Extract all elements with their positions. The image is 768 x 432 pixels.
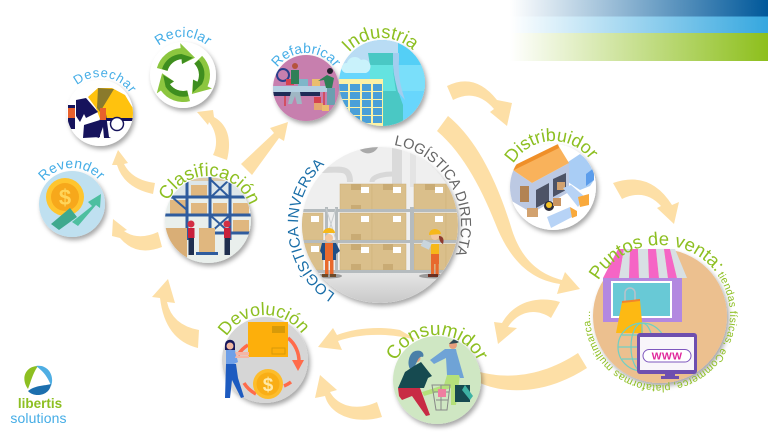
circle: industria: [339, 40, 425, 126]
circle: desechar: [67, 80, 133, 146]
arrow: clasificación to refabricar: [241, 122, 288, 175]
icon: garbage truck: [68, 88, 134, 138]
arrow: distribuidor to puntos de venta: [613, 179, 679, 224]
illustration: woman returning parcel: [225, 340, 249, 398]
icon: monitor with www: WWW: [652, 350, 682, 362]
illustration: shoppers with cart: [398, 338, 473, 416]
panel: industria: [338, 27, 430, 132]
panel: logística central: [288, 135, 472, 309]
illustration: warehouse racks: [165, 176, 252, 258]
label: devolución: Devolución: [218, 302, 308, 336]
label: refabricar: Refabricar: [271, 42, 340, 67]
header gradient banner: [510, 0, 768, 61]
icon: coin and arrow: $: [59, 185, 71, 210]
icon: monitor with www: [637, 333, 697, 379]
arrow: logística directa, industria to puntos de venta: [437, 116, 580, 294]
panel: distribuidor: [504, 128, 601, 236]
circle: puntos de venta: [593, 249, 727, 383]
arrow: devolución to clasificación: [152, 279, 199, 348]
arrow: puntos de venta to consumidor: [494, 300, 560, 344]
label: revender: Revender: [38, 160, 104, 180]
icon: dollar coin: $: [263, 375, 274, 396]
arrow: clasificación to revender: [112, 219, 162, 250]
icon: return cycle arrows: [238, 338, 299, 394]
circle: revender: [39, 171, 105, 237]
arrow: consumidor to puntos de venta band: [480, 353, 587, 390]
label: desechar: Desechar: [73, 70, 136, 92]
label: logística inversa: LOGÍSTICA INVERSA: [288, 160, 334, 302]
illustration: warehouse with trucks: [510, 144, 594, 228]
icon: recycling arrows: [149, 43, 224, 114]
label: clasificación: Clasificación: [160, 162, 258, 204]
label: canales de venta: tiendas físicas, eCommerce, plataformas multimarca...: [584, 272, 738, 392]
circle: consumidor: [393, 336, 481, 424]
icon: parcel box: [248, 322, 288, 357]
illustration: factory and building: [338, 40, 428, 130]
icon: shopping bag: [616, 288, 643, 333]
panel: puntos de venta: [584, 232, 738, 392]
label: logística directa: LOGÍSTICA DIRECTA: [395, 135, 472, 254]
circle: refabricar: [273, 55, 339, 121]
icon: shop storefront: [603, 249, 687, 322]
panel: reciclar: [149, 26, 221, 114]
logo: libertis solutions: [10, 366, 67, 426]
arrow: industria to distribuidor: [447, 81, 512, 126]
circle: clasificación: [165, 177, 251, 263]
panel: clasificación: [160, 162, 258, 269]
panel: devolución: [218, 302, 313, 409]
label: consumidor: Consumidor: [387, 324, 487, 358]
circle: reciclar: [150, 42, 216, 108]
arrow: clasificación to reciclar: [197, 110, 229, 160]
illustration: conveyor belt with workers: [272, 63, 335, 111]
logo text: libertis: libertis: [18, 396, 62, 411]
label: distribuidor: Distribuidor: [504, 128, 598, 162]
panel: desechar: [66, 70, 138, 152]
icon: globe: [618, 323, 666, 371]
logo text: solutions: solutions: [10, 410, 67, 426]
panel: consumidor: [387, 324, 487, 430]
icon: arrowhead: [292, 360, 304, 371]
arrow: consumidor to devolución lower: [315, 375, 382, 420]
circle: distribuidor: [510, 144, 596, 230]
icon: logo swirl: [24, 366, 52, 395]
circle: warehouse background: [302, 147, 458, 303]
circle: devolución: [222, 317, 308, 403]
label: reciclar: Reciclar: [154, 26, 212, 45]
panel: revender: [38, 160, 110, 243]
label: puntos de venta: Puntos de venta:: [588, 232, 722, 280]
panel: refabricar: [271, 42, 342, 127]
label: industria: Industria: [341, 27, 416, 52]
arrow: consumidor to devolución upper: [318, 328, 417, 350]
arrow: clasificación to desechar: [112, 150, 155, 194]
illustration: warehouse with boxes and workers: [300, 147, 460, 304]
